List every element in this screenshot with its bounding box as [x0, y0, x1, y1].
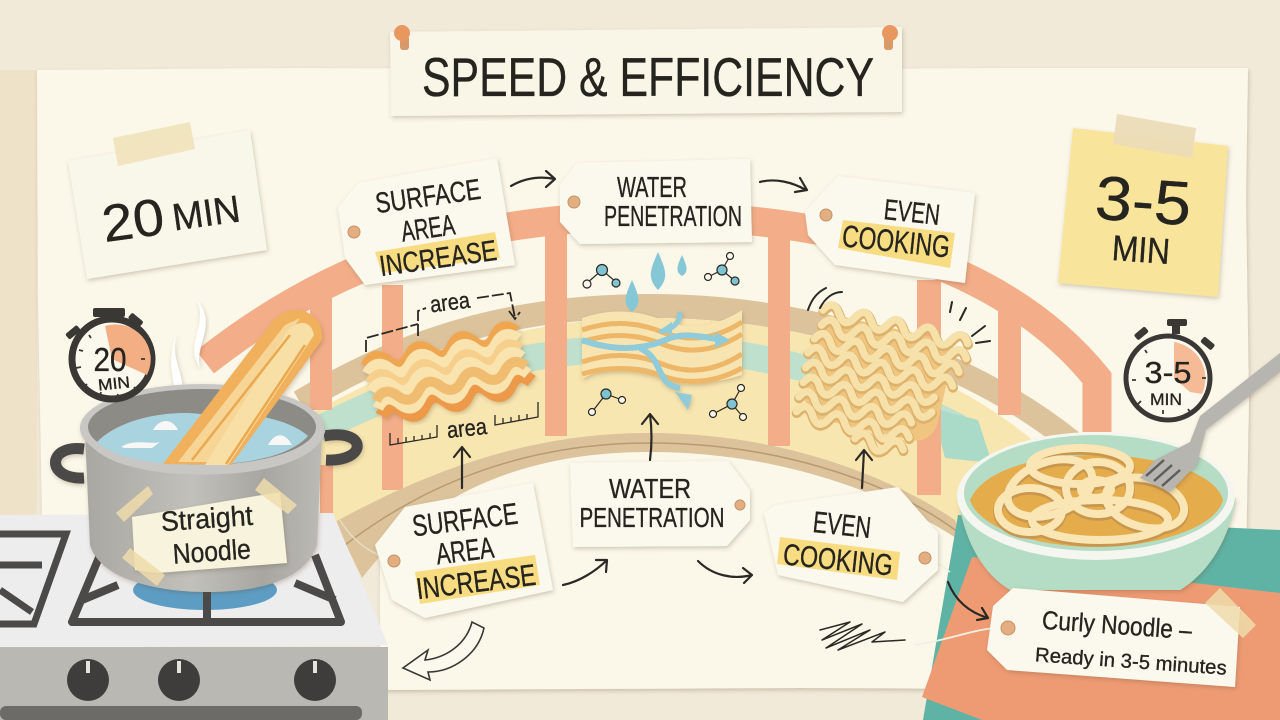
- pin right: [882, 25, 898, 50]
- bridge diagram: [205, 216, 1097, 578]
- tag text: WATER: [617, 172, 687, 204]
- arrow: lower 2: [698, 561, 752, 583]
- arrow: lower 1: [563, 560, 607, 585]
- mint band: [318, 347, 960, 430]
- noodle bundle: [163, 310, 322, 465]
- tag: curly noodle: [915, 588, 1256, 687]
- area text bottom: area: [446, 413, 488, 443]
- sticky text: 3-5: [1093, 164, 1194, 239]
- bowl with noodles: [957, 432, 1236, 590]
- string: [915, 628, 1008, 645]
- stove front: [0, 647, 388, 720]
- tag text: SURFACE: [373, 174, 483, 220]
- scribble: [820, 622, 905, 650]
- hole: [735, 500, 745, 510]
- lower arc: [335, 433, 962, 578]
- title text: SPEED & EFFICIENCY: [422, 46, 874, 108]
- arrow: top 2: [760, 178, 807, 192]
- tape: [1205, 588, 1256, 638]
- string: [925, 558, 950, 572]
- highlight: [777, 537, 900, 580]
- stopwatch: 3-5 min: [1126, 319, 1215, 420]
- arrow: top 1: [511, 171, 555, 187]
- tag: even cooking bottom: COOKING: [782, 538, 894, 583]
- tape: [113, 122, 195, 166]
- knobs: [67, 659, 336, 701]
- hole: [348, 226, 360, 238]
- mint arrow head: [932, 408, 992, 463]
- noodle stack: surface area: [364, 324, 533, 423]
- note: 20 min: [68, 122, 267, 279]
- front rim: [84, 430, 323, 472]
- orange paper: [922, 557, 1280, 720]
- label text: Straight: [160, 500, 254, 537]
- tag text: WATER: [609, 473, 691, 504]
- tag: surface area increase top: AREA: [399, 209, 458, 249]
- stove top: [0, 513, 388, 648]
- hole: [388, 555, 400, 567]
- tape pieces: [116, 478, 297, 586]
- straight noodle label: Noodle: [172, 533, 252, 570]
- hole: [820, 209, 832, 221]
- sticky note: 3-5 min: [1058, 114, 1228, 297]
- hole: [568, 196, 580, 208]
- tag text: EVEN: [811, 506, 873, 545]
- tan arch band: [300, 306, 1072, 442]
- noodles: [998, 450, 1190, 542]
- stopwatch: 3-5 min: MIN: [1150, 390, 1182, 409]
- bowl rim: [957, 432, 1235, 560]
- pot: [56, 310, 357, 592]
- yellow arch fill: [300, 318, 1035, 530]
- ticks: [1132, 350, 1206, 414]
- left grate: [0, 534, 66, 624]
- table papers: [922, 515, 1280, 720]
- tag text: EVEN: [882, 194, 941, 232]
- handles: [56, 449, 84, 478]
- highlight: [375, 232, 500, 273]
- orange segment: [1174, 342, 1205, 394]
- tag: even cooking top: COOKING: [841, 218, 952, 265]
- area text top: area: [428, 287, 471, 317]
- orange segment: [105, 324, 151, 375]
- stopwatch: 20 min: [65, 308, 152, 399]
- area annotations: [366, 287, 538, 445]
- arrow: up 1: [454, 447, 470, 488]
- arrows: [454, 171, 988, 650]
- tag text: SURFACE: [410, 498, 520, 543]
- arrow: up 3: [856, 450, 872, 488]
- hole: [1001, 621, 1015, 635]
- water drops: [626, 252, 687, 312]
- sticky note: 3-5 min: MIN: [1111, 227, 1171, 272]
- outer peach arch: [205, 216, 1097, 432]
- water flow: [582, 312, 725, 388]
- return arrow: [403, 622, 484, 680]
- highlight: [838, 220, 955, 268]
- straight noodle label: [116, 478, 297, 586]
- watch text: 3-5: [1144, 355, 1192, 390]
- teal paper: [923, 515, 1280, 720]
- tag: water penetration bottom: [570, 461, 750, 547]
- peach posts: [310, 228, 1021, 520]
- tag: surface area increase bottom: [340, 483, 553, 618]
- fork: [1140, 353, 1280, 492]
- motion marks: [808, 288, 990, 343]
- arrow: up 2: [642, 414, 658, 460]
- tag: even cooking top: [805, 176, 975, 283]
- tag: curly noodle: Ready in 3-5 minutes: [1034, 644, 1227, 680]
- bowl body: [958, 498, 1236, 590]
- water: [97, 413, 308, 465]
- broth: [970, 455, 1223, 547]
- note number: 20: [98, 188, 168, 254]
- noodle block: even cooking: [790, 302, 972, 467]
- tag: water penetration top: [560, 159, 752, 244]
- burner: [133, 570, 277, 610]
- string: [340, 520, 395, 561]
- note unit: MIN: [170, 188, 243, 240]
- ticks: [76, 335, 145, 398]
- hole: [919, 552, 931, 564]
- pot body: [85, 432, 322, 592]
- watch text: 20: [94, 341, 126, 378]
- highlight: [415, 555, 540, 604]
- main grate: [72, 555, 341, 622]
- title banner: [390, 25, 902, 116]
- tag: water penetration top: PENETRATION: [604, 201, 742, 233]
- tag: water penetration bottom: PENETRATION: [580, 502, 724, 533]
- tag: surface area increase bottom: AREA: [434, 532, 496, 571]
- steam: [171, 300, 206, 404]
- pin left: [394, 25, 410, 50]
- stove: [0, 513, 388, 720]
- tag: surface area increase top: INCREASE: [377, 235, 499, 283]
- noodle stack: water penetration: [582, 310, 742, 410]
- tag: surface area increase bottom: INCREASE: [414, 559, 538, 606]
- tag text: Curly Noodle –: [1041, 605, 1193, 645]
- tag: even cooking bottom: [764, 487, 950, 602]
- molecules: [583, 252, 746, 420]
- rim: [80, 384, 324, 472]
- tag: surface area increase top: [338, 158, 515, 285]
- arrow: to curly tag: [948, 582, 988, 620]
- stopwatch: 20 min: MIN: [97, 374, 131, 395]
- tape: [1113, 114, 1196, 158]
